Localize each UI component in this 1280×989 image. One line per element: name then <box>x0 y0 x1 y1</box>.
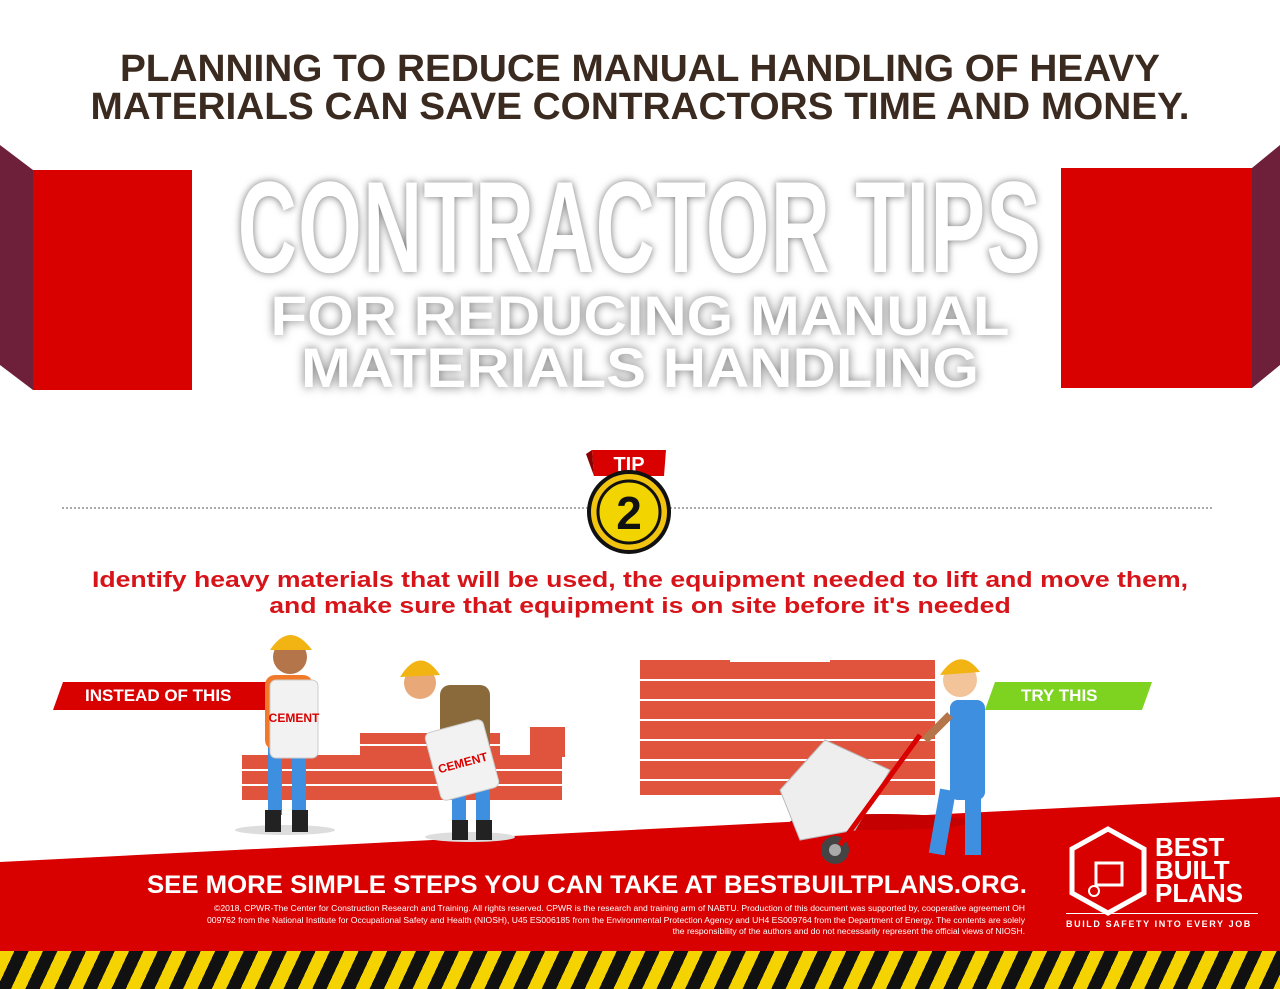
headline: PLANNING TO REDUCE MANUAL HANDLING OF HEAVY <box>120 48 1160 90</box>
main title: MATERIALS HANDLING <box>301 336 979 399</box>
label: instead of this: INSTEAD OF THIS <box>85 686 231 705</box>
dotted divider <box>62 507 1212 509</box>
logo: best built plans <box>1066 826 1258 929</box>
label: try this: TRY THIS <box>1021 686 1098 705</box>
tip badge: 2 <box>616 487 642 539</box>
label: try this <box>985 682 1152 710</box>
tip badge: TIP <box>613 454 645 476</box>
copyright text: ©2018, CPWR-The Center for Construction Research and Training. All rights reserved. CPWR is the research and training arm of NABTU. Production of this document was supported by, cooperative agreement OH <box>214 903 1025 913</box>
left scene: workers carrying bags: CEMENT <box>269 711 320 725</box>
logo: best built plans: BUILD SAFETY INTO EVERY JOB <box>1066 919 1252 929</box>
label: instead of this <box>53 682 278 710</box>
main title <box>236 154 1044 399</box>
tip badge <box>586 450 671 554</box>
copyright text: the responsibility of the authors and do not necessarily represent the official views of NIOSH. <box>673 926 1025 936</box>
tip description: and make sure that equipment is on site before it's needed <box>269 593 1011 618</box>
footer call to action: SEE MORE SIMPLE STEPS YOU CAN TAKE AT BESTBUILTPLANS.ORG. <box>147 871 1027 899</box>
logo: best built plans: PLANS <box>1155 878 1243 908</box>
left scene: workers carrying bags <box>235 635 565 842</box>
right scene: brick wall and worker with hand truck <box>640 659 985 864</box>
logo: best built plans: BUILT <box>1155 855 1230 885</box>
logo: best built plans: BEST <box>1155 832 1224 862</box>
left scene: workers carrying bags: CEMENT <box>436 749 490 776</box>
headline: MATERIALS CAN SAVE CONTRACTORS TIME AND MONEY. <box>91 86 1189 128</box>
copyright text: 009762 from the National Institute for Occupational Safety and Health (NIOSH), U45 ES006185 from the Environmental Protection Agency and UH4 ES009764 from the Department of Energy. The contents are solely <box>207 914 1025 924</box>
tip description <box>92 567 1188 618</box>
left red banner block <box>0 145 192 390</box>
headline <box>91 48 1189 128</box>
main title: FOR REDUCING MANUAL <box>271 284 1009 347</box>
copyright text <box>207 903 1025 936</box>
tip description: Identify heavy materials that will be used, the equipment needed to lift and move them, <box>92 567 1188 592</box>
main title: CONTRACTOR TIPS <box>238 154 1042 300</box>
right red banner block <box>1061 145 1280 388</box>
bottom red band <box>0 797 1280 951</box>
hazard stripes <box>0 951 1280 989</box>
